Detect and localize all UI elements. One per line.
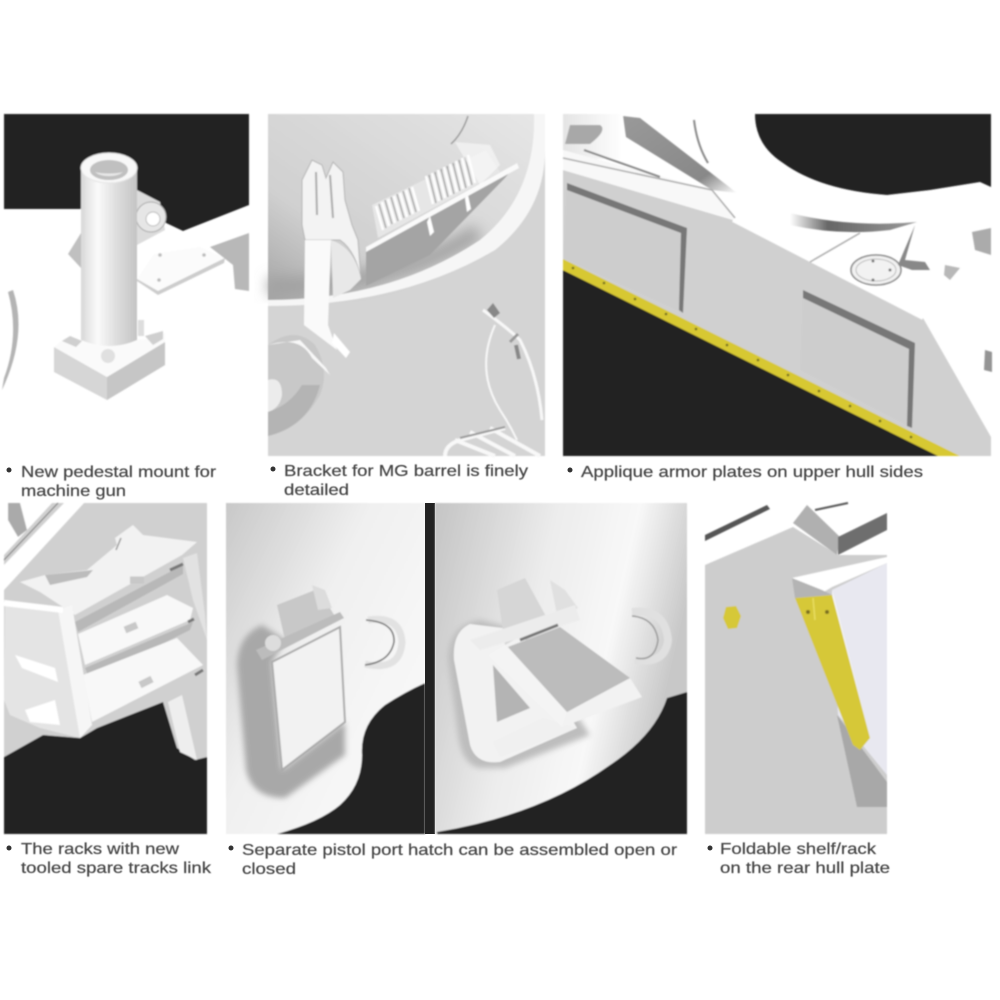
panel: pistol port open: [435, 503, 687, 834]
rack leg: [168, 695, 197, 760]
caption: pedestal mount: New pedestal mount for: [21, 464, 217, 481]
armor plate 1: [563, 183, 687, 313]
side bracket: [68, 190, 166, 268]
black background area: [4, 114, 249, 231]
caption: pedestal mount: [6, 464, 217, 500]
white diagonal band: [4, 503, 84, 590]
panel: pedestal mount: [2, 114, 249, 400]
C ring: [632, 612, 668, 661]
gray hull: [705, 527, 887, 834]
open hatch: [470, 578, 642, 757]
turret ring arc: [790, 213, 917, 232]
caption: rear hull plate: [708, 841, 890, 877]
hatch ring: [268, 335, 330, 436]
caption: pistol port: [228, 842, 678, 878]
yellow shelf strip: [795, 595, 870, 750]
caption: pistol port: Separate pistol port hatch can be assembled open or: [242, 842, 678, 859]
closed hatch plate: [272, 627, 345, 770]
hull arc fragment: [2, 290, 18, 390]
caption: MG barrel bracket: [270, 463, 528, 499]
caption: MG barrel bracket: detailed: [284, 482, 349, 499]
rail with springs: [366, 142, 519, 286]
top box: [793, 503, 887, 555]
black corner: [277, 683, 425, 834]
caption: rear hull plate: Foldable shelf/rack: [720, 841, 877, 858]
mount plate: [137, 233, 249, 295]
bracket clip: [302, 160, 361, 358]
upper deck details: [563, 114, 737, 220]
hatch disc: [851, 255, 901, 285]
hatch recess: [237, 625, 345, 798]
rack frame: [4, 600, 92, 738]
black upper shape: [755, 114, 991, 195]
black corner: [437, 692, 687, 834]
caption: pedestal mount: machine gun: [21, 483, 126, 500]
right hull face: [832, 563, 887, 775]
recessed bowl: [268, 114, 534, 300]
caption: MG barrel bracket: Bracket for MG barrel is finely: [284, 463, 528, 480]
dark strip: [837, 715, 887, 807]
hull side: [563, 170, 991, 456]
caption: track racks: The racks with new: [21, 841, 180, 858]
panel: applique armor: [563, 114, 992, 456]
black ground: [4, 702, 207, 834]
lower grille: [445, 427, 540, 456]
right post: [183, 553, 207, 640]
panel: track racks: [4, 503, 207, 834]
yellow strip: [563, 259, 960, 456]
track link rows: [75, 564, 203, 722]
lower black area: [563, 270, 942, 456]
hinge: [256, 585, 344, 660]
caption: applique armor: Applique armor plates on upper hull sides: [581, 464, 923, 481]
top dark bar: [705, 505, 770, 541]
caption: pistol port: closed: [242, 861, 296, 878]
C ring: [365, 619, 402, 666]
armor plate 2: [800, 290, 915, 428]
shelf top: [792, 557, 887, 598]
engine deck detail: [898, 225, 992, 372]
panel: rear hull plate: [705, 503, 887, 834]
panel: MG barrel bracket: [268, 114, 545, 456]
caption: track racks: [6, 841, 212, 877]
pedestal base: [54, 320, 165, 400]
yellow bolt: [723, 606, 741, 629]
wire handle: [483, 303, 542, 440]
hatch recess: [448, 620, 590, 768]
caption: track racks: tooled spare tracks link: [21, 860, 212, 877]
divider strip: [425, 503, 435, 834]
caption: rear hull plate: on the rear hull plate: [720, 860, 890, 877]
rack arm upper: [20, 525, 197, 615]
panel: pistol port closed: [226, 503, 425, 834]
pedestal tube: [81, 153, 137, 346]
